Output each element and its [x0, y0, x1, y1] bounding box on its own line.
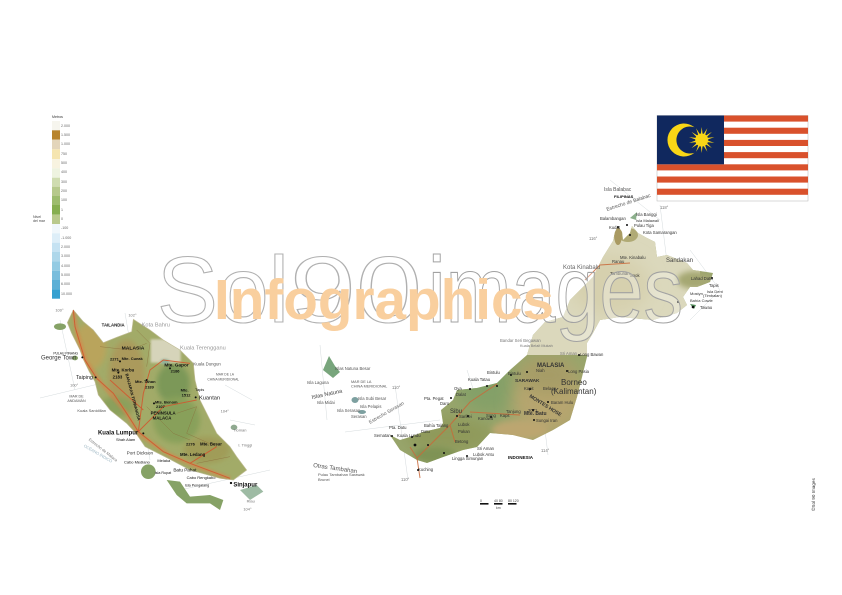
- place labels: Song: [486, 413, 496, 418]
- place labels: Bintulu: [487, 370, 500, 375]
- place labels: 1512: [182, 392, 191, 397]
- place labels: Estrecho Serasan: [368, 401, 406, 426]
- place labels: Bandar Seri Begawan: [500, 338, 541, 343]
- place labels: 110°: [401, 477, 410, 482]
- place labels: [307, 187, 724, 482]
- place labels: 104°: [221, 409, 229, 414]
- scale bar: 40 80: [494, 499, 503, 503]
- place labels: Kuala Terengganu: [180, 346, 226, 352]
- place labels: Dalat: [456, 392, 467, 397]
- legend labels: 4.000: [61, 264, 70, 268]
- legend labels: 5.000: [61, 273, 70, 277]
- place labels: Mte.: [181, 387, 189, 392]
- place labels: Kuala Sanidillan: [77, 408, 106, 413]
- place labels: Lingga Simunjan: [452, 456, 484, 461]
- legend labels: 200: [61, 189, 67, 193]
- map: peninsular Malaysia: [41, 308, 264, 510]
- legend labels: 0: [61, 217, 63, 221]
- place labels: Kudat: [609, 225, 621, 230]
- place labels: Brunei: [318, 477, 330, 482]
- place labels: Port Dickson: [127, 450, 153, 455]
- place labels: Taiping: [76, 375, 93, 381]
- flag canton: [657, 116, 724, 164]
- place labels: CHINA MERIDIONAL: [207, 377, 239, 381]
- place labels: 2107: [156, 404, 166, 409]
- rivers and roads: [410, 263, 630, 478]
- place labels: Kapit: [524, 386, 534, 391]
- place labels: Sook: [630, 273, 640, 278]
- secondary roads: [100, 330, 230, 463]
- place labels: Isla Banggi: [636, 212, 657, 217]
- legend labels: 1.500: [61, 133, 70, 137]
- legend labels: 300: [61, 180, 67, 184]
- washed-out Sabah area: [520, 220, 700, 355]
- place labels: Datu: [421, 429, 431, 434]
- place labels: Cabo Mediano: [124, 459, 151, 464]
- place labels: Otras Tambahan: [313, 463, 357, 475]
- place labels: Sandakan: [666, 258, 693, 264]
- legend labels: del mar: [33, 219, 46, 223]
- place labels: Kanowit: [478, 416, 494, 421]
- place labels: Daro: [440, 401, 450, 406]
- place labels: 116°: [589, 236, 598, 241]
- place labels: PENÍNSULA: [151, 410, 177, 415]
- place labels: Isla Pelapis: [360, 404, 381, 409]
- place labels: Long Bawan: [580, 352, 604, 357]
- place labels: Mte. Besar: [200, 441, 222, 446]
- legend: elevation scale: [33, 115, 72, 299]
- legend labels: 1.000: [61, 142, 70, 146]
- place labels: Pulau Tiga: [634, 223, 654, 228]
- islands: [54, 323, 263, 510]
- place labels: 114°: [541, 448, 550, 453]
- flag of Malaysia: [657, 116, 808, 201]
- place labels: Tawau: [700, 305, 713, 310]
- place labels: Sibu: [450, 409, 462, 415]
- legend labels: 3.000: [61, 254, 70, 258]
- place labels: 104°: [243, 507, 252, 512]
- place labels: Batu Pahat: [173, 467, 197, 472]
- place labels: Sri Aman: [477, 446, 495, 451]
- place labels: INDONESIA: [508, 455, 534, 460]
- legend labels: 2.000: [61, 245, 70, 249]
- place labels: Borneo: [561, 378, 587, 387]
- watermark: Sol90images: 90: [290, 237, 422, 342]
- roads: [73, 310, 230, 478]
- place labels: TAILANDIA: [102, 322, 126, 327]
- place labels: [41, 307, 258, 512]
- place labels: Isla Dent: [707, 289, 724, 294]
- credit: ©Sol 90 Images: [810, 478, 816, 511]
- place labels: Isla Balabac: [604, 187, 632, 193]
- place labels: MONTES HOSE: [528, 394, 563, 419]
- scale bar: [480, 499, 519, 510]
- place labels: Kota Kinabalu: [563, 265, 600, 271]
- watermark: Sol90images: Sol: [157, 237, 289, 342]
- place labels: Cabo Rengkabo: [187, 475, 216, 480]
- place labels: Kuala Lundu: [397, 433, 421, 438]
- place labels: 2186: [171, 369, 180, 374]
- watermark: Sol90images: [157, 237, 683, 342]
- place labels: FILIPINAS: [614, 194, 634, 199]
- place labels: Pta. Datu: [389, 425, 407, 430]
- place labels: 102°: [128, 313, 137, 318]
- fourteen-point star: [689, 127, 715, 153]
- place labels: 2189: [145, 385, 155, 390]
- legend labels: 400: [61, 170, 67, 174]
- place labels: Isla Malawali: [636, 218, 659, 223]
- place labels: (Kalimantan): [551, 387, 597, 396]
- place labels: Niah: [536, 368, 545, 373]
- place labels: Estrecho de Malaca: [88, 437, 119, 463]
- place labels: SARAWAK: [515, 378, 540, 384]
- urban corridor: [73, 310, 230, 478]
- legend labels: 2.000: [61, 124, 70, 128]
- place labels: Kuala Dungun: [193, 361, 221, 366]
- place labels: Balambangan: [600, 216, 627, 221]
- graticule lines: [40, 180, 720, 490]
- place labels: Tambunan: [610, 271, 630, 276]
- place labels: MAR DE LA: [351, 380, 372, 384]
- place labels: George Town: [41, 355, 76, 361]
- watermark: Infographics: Infographics: [214, 268, 554, 332]
- watermark: Sol90images: images: [428, 237, 683, 342]
- place labels: Isla Laguna: [307, 380, 329, 385]
- place labels: Mte. Ledang: [180, 452, 206, 457]
- place labels: Bahía Talang: [424, 423, 449, 428]
- place labels: Ranau: [612, 259, 625, 264]
- legend labels: 100: [61, 198, 67, 202]
- map: Malaysian Borneo: [307, 187, 724, 482]
- place labels: Tapis: [195, 387, 204, 392]
- place labels: Tioman: [233, 427, 246, 432]
- infographic canvas: [33, 115, 816, 511]
- place labels: Isla Midai: [317, 400, 335, 405]
- place labels: 100°: [70, 383, 79, 388]
- place labels: Sungai Iran: [536, 418, 558, 423]
- place labels: Bintulu: [508, 371, 521, 376]
- place labels: PULAU PINANG: [53, 351, 79, 355]
- place labels: Islas Natuna: [311, 388, 344, 401]
- place labels: Serasan: [351, 414, 367, 419]
- legend labels: 500: [61, 161, 67, 165]
- place labels: MALASIA: [537, 363, 565, 369]
- place labels: Pakan: [458, 429, 471, 434]
- place labels: Melaka: [157, 458, 171, 463]
- place labels: Shah Alam: [116, 437, 136, 442]
- legend labels: 750: [61, 152, 67, 156]
- place labels: Bahía Cowie: [690, 298, 713, 303]
- place labels: Kuantan: [199, 395, 220, 401]
- place labels: Riau: [247, 499, 255, 504]
- place labels: Lubok: [458, 422, 470, 427]
- place labels: MAR DE LA: [216, 372, 235, 376]
- place labels: 100°: [55, 307, 64, 312]
- place labels: CHINA MERIDIONAL: [351, 384, 387, 388]
- place labels: 2183: [113, 374, 123, 379]
- place labels: Isla Serasan: [337, 408, 361, 413]
- place labels: Sematan: [374, 433, 391, 438]
- city markers: [391, 224, 713, 471]
- crescent: [667, 123, 694, 156]
- place labels: Sinjapur: [233, 482, 258, 488]
- place labels: Tapis: [709, 283, 719, 288]
- place labels: Isla Pengalang: [185, 483, 209, 487]
- place labels: Kuala Tatau: [468, 377, 491, 382]
- place labels: Kuala Belait Mukah: [520, 344, 553, 348]
- place labels: Baram Hulu: [551, 400, 574, 405]
- place labels: Isla Subi Besar: [358, 396, 387, 401]
- legend labels: -1.000: [61, 236, 71, 240]
- place labels: MALACA: [153, 416, 172, 421]
- place labels: Mte. Kinabalu: [620, 255, 646, 260]
- scale bar: 80 120: [508, 499, 519, 503]
- place labels: 118°: [660, 205, 669, 210]
- place labels: 2276: [186, 441, 196, 446]
- place labels: Lubok Antu: [473, 452, 495, 457]
- flag stripes: [657, 116, 808, 195]
- place labels: Betong: [455, 439, 469, 444]
- place labels: Sarikei: [459, 414, 472, 419]
- place labels: Isla Rupat: [155, 471, 171, 475]
- place labels: Long Pasia: [568, 369, 590, 374]
- place labels: Kota Bahru: [142, 322, 170, 328]
- place labels: BANJARAN TITIWANGSA: [124, 373, 142, 421]
- place labels: ANDAMÁN: [67, 399, 86, 403]
- place labels: Kota Samarangan: [643, 230, 677, 235]
- coast outline: [67, 310, 247, 480]
- scale bar: 0: [480, 499, 482, 503]
- place labels: Pulau Tambahan Sarawak: [318, 472, 365, 477]
- islands: [323, 212, 696, 414]
- place labels: Mostyn: [690, 291, 703, 296]
- legend labels: -100: [61, 226, 68, 230]
- place labels: Mte. Gapor: [164, 362, 189, 367]
- place labels: 2271: [110, 357, 120, 362]
- legend labels: Nivel: [33, 215, 41, 219]
- landmass relief: [380, 220, 720, 470]
- place labels: Lahad Datu: [691, 276, 713, 281]
- place labels: Kapit: [500, 413, 510, 418]
- place labels: Belaga: [543, 386, 557, 391]
- place labels: Mte. Cueak: [122, 356, 143, 361]
- city markers: [81, 356, 232, 484]
- place labels: Mte. Tahan: [135, 379, 156, 384]
- place labels: Kuala Lumpur: [98, 431, 139, 437]
- legend labels: 10.000: [61, 292, 72, 296]
- legend labels: Metros: [52, 115, 63, 119]
- legend bar: [52, 121, 60, 299]
- place labels: Sri Aman: [560, 351, 578, 356]
- legend labels: 6.000: [61, 282, 70, 286]
- scale bar: km: [496, 506, 501, 510]
- landmass relief: [68, 311, 246, 480]
- legend labels: 1: [61, 208, 63, 212]
- place labels: I. Tinggi: [238, 443, 252, 448]
- place labels: Pta. Pegat: [424, 396, 444, 401]
- legend labels: [33, 115, 72, 296]
- place labels: Mte. Benom: [155, 399, 178, 404]
- place labels: 2071: [528, 408, 538, 413]
- place labels: OCÉANO ÍNDICO: [83, 443, 113, 464]
- place labels: MALASIA: [122, 345, 145, 351]
- place labels: Mte. Batu: [524, 411, 546, 417]
- place labels: Mte. Korbu: [112, 367, 135, 372]
- place labels: Kuching: [418, 467, 434, 472]
- place labels: Oya: [454, 386, 462, 391]
- place labels: 110°: [392, 385, 401, 390]
- place labels: (Timbalan): [703, 293, 723, 298]
- place labels: Estrecho de Balabac: [606, 193, 652, 213]
- place labels: Islas Natuna Besar: [335, 366, 371, 371]
- place labels: MAR DE: [69, 394, 84, 398]
- place labels: Tanjung: [506, 409, 521, 414]
